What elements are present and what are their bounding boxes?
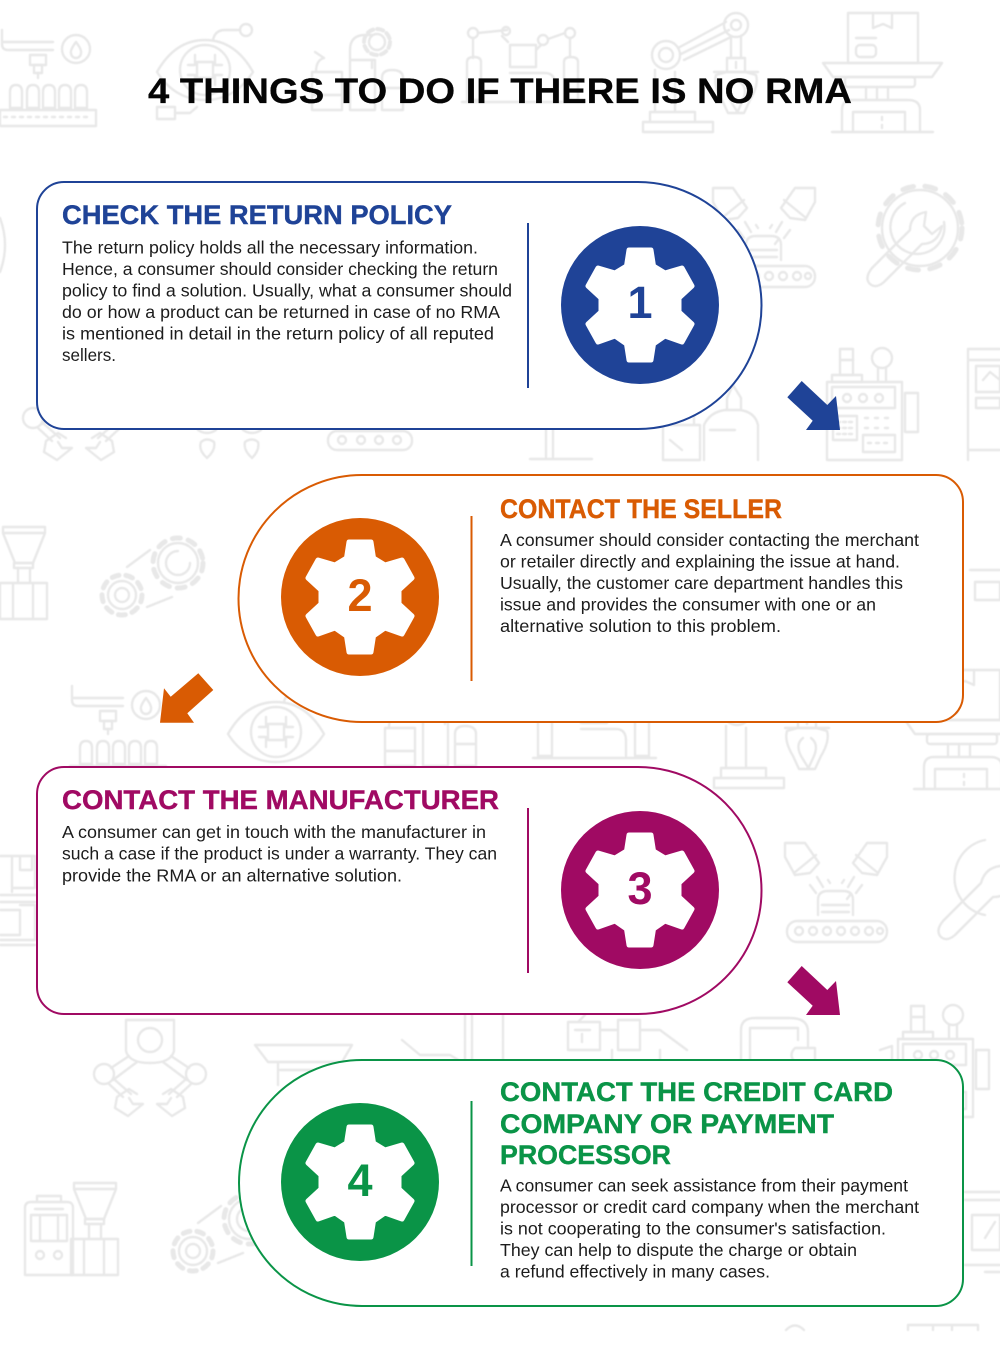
heading: contact the credit card company or payment processor: COMPANY OR PAYMENT xyxy=(500,1109,835,1139)
divider xyxy=(527,223,529,388)
panel: contact the credit card company or payment processor xyxy=(239,1060,963,1306)
text block: credit card description xyxy=(500,1176,919,1282)
text block: return policy description: policy to find a solution. Usually, what a consumer should xyxy=(62,281,512,301)
text block: credit card description: A consumer can seek assistance from their payment xyxy=(500,1176,908,1196)
icon: gear number 1 xyxy=(561,226,719,384)
icon: gear number 4 xyxy=(281,1103,439,1261)
heading: contact the credit card company or payment processor: CONTACT THE CREDIT CARD xyxy=(500,1077,893,1107)
text block: manufacturer description: provide the RMA or an alternative solution. xyxy=(62,866,402,886)
text block: seller description: issue and provides the consumer with one or an xyxy=(500,594,876,614)
heading: check the return policy: CHECK THE RETURN POLICY xyxy=(62,200,452,230)
panel: contact the manufacturer xyxy=(37,767,762,1014)
icon: gear number 1: 1 xyxy=(627,277,653,328)
divider xyxy=(470,516,472,681)
heading: contact the seller: CONTACT THE SELLER xyxy=(500,494,782,524)
text block: return policy description: sellers. xyxy=(62,345,116,365)
icon: gear number 2 xyxy=(281,518,439,676)
text block: return policy description xyxy=(62,238,512,365)
text block: credit card description: They can help to dispute the charge or obtain xyxy=(500,1240,857,1260)
icon: gear number 2: 2 xyxy=(347,570,373,621)
text block: seller description: alternative solution to this problem. xyxy=(500,616,781,636)
icon: gear number 3 xyxy=(561,811,719,969)
text block: credit card description: is not cooperating to the consumer's satisfaction. xyxy=(500,1218,886,1238)
text block: seller description xyxy=(500,530,919,636)
text block: return policy description: do or how a product can be returned in case of no RMA xyxy=(62,302,500,322)
panel: check the return policy xyxy=(37,182,762,429)
arrow: card 1 to card 2 xyxy=(787,381,840,430)
text block: manufacturer description xyxy=(62,822,497,886)
heading: contact the manufacturer: CONTACT THE MANUFACTURER xyxy=(62,785,499,815)
divider xyxy=(527,808,529,973)
divider xyxy=(470,1101,472,1266)
arrow: card 2 to card 3 xyxy=(160,673,213,723)
text block: manufacturer description: A consumer can get in touch with the manufacturer in xyxy=(62,822,486,842)
text block: seller description: or retailer directly and explaining the issue at hand. xyxy=(500,551,900,571)
text block: credit card description: a refund effectively in many cases. xyxy=(500,1262,770,1282)
text block: manufacturer description: such a case if the product is under a warranty. They can xyxy=(62,844,497,864)
text block: seller description: A consumer should consider contacting the merchant xyxy=(500,530,919,550)
text block: return policy description: The return policy holds all the necessary information. xyxy=(62,238,478,258)
text block: credit card description: processor or credit card company when the merchant xyxy=(500,1197,919,1217)
icon: gear number 3: 3 xyxy=(627,863,653,914)
text block: seller description: Usually, the customer care department handles this xyxy=(500,573,903,593)
heading: contact the credit card company or payment processor: PROCESSOR xyxy=(500,1140,671,1170)
heading: contact the credit card company or payment processor xyxy=(500,1077,893,1170)
text block: return policy description: is mentioned in detail in the return policy of all reputed xyxy=(62,324,494,344)
icon: gear number 4: 4 xyxy=(347,1155,373,1206)
arrow: card 3 to card 4 xyxy=(787,966,840,1015)
text block: return policy description: Hence, a consumer should consider checking the return xyxy=(62,259,498,279)
panel: contact the seller xyxy=(239,475,963,722)
title: 4 THINGS TO DO IF THERE IS NO RMA xyxy=(148,72,852,111)
